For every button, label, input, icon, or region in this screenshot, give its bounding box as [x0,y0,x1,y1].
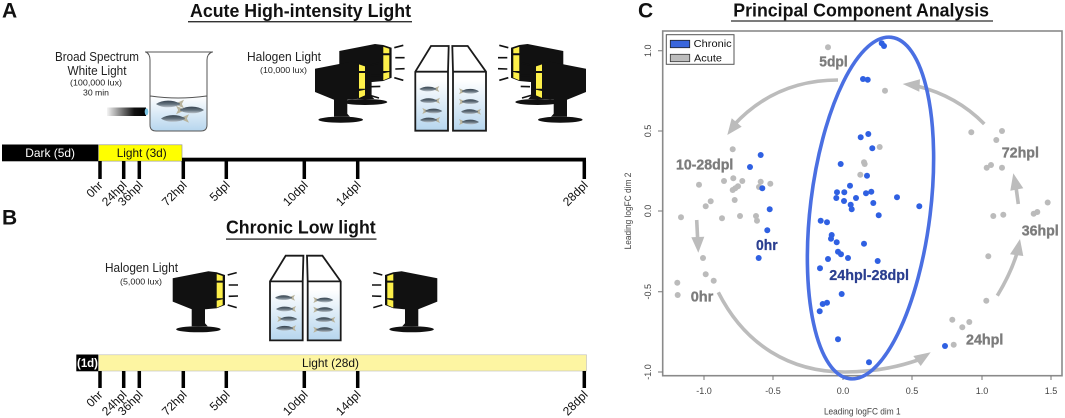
text: broad spectrum white light: Broad Spectrum [55,49,139,64]
panel letter B: B [2,206,17,230]
cluster labels: 24hpl [966,331,1003,348]
panel B: chronic low light [2,206,591,418]
timeline B ticks and labels [83,371,591,418]
scatter plot frame and axes: 0.0 [837,386,849,396]
timeline A ticks and labels [83,161,591,209]
text: halogen light 5,000 lux: (5,000 lux) [120,276,162,286]
panel C: principal component analysis [623,0,1062,417]
ellipse: chronic cluster [790,30,951,386]
text: broad spectrum white light [55,49,139,98]
timeline B ticks and labels: 24hpl [99,388,130,418]
timeline A bars [2,144,586,162]
scatter plot frame and axes: 1.0 [643,44,653,57]
legend: Chronic [694,38,732,50]
cluster labels: 5dpl [819,54,848,71]
scatter plot frame and axes: 0.5 [906,386,918,396]
timeline B bars: Light (28d) [302,356,359,370]
text: broad spectrum white light: (100,000 lux) [70,78,122,88]
scatter plot frame and axes: -0.5 [643,284,653,299]
icon: left halogen lamps [315,44,405,123]
timeline A ticks and labels: 0hr [83,178,106,200]
icon: right halogen lamps [498,44,586,123]
timeline A ticks and labels: 14dpl [333,178,364,209]
timeline B bars: (1d) [77,356,98,370]
timeline A ticks and labels: 36hpl [115,178,146,209]
icon: left halogen lamp [173,271,238,332]
timeline A ticks and labels: 10dpl [280,178,311,209]
timeline B ticks and labels: 72hpl [159,388,190,418]
timeline A ticks and labels: 72hpl [159,178,190,209]
cluster labels [676,54,1059,348]
cluster labels: 0hr [756,237,778,254]
cluster labels: 10-28dpl [676,156,733,173]
cluster labels: 72hpl [1002,145,1039,162]
icon: fish tanks [270,256,341,340]
scatter plot frame and axes: 1.5 [1045,386,1057,396]
text: halogen light 10,000 lux [247,49,321,75]
cluster labels: 0hr [691,289,713,306]
heading: Principal Component Analysis: Principal Component Analysis [733,1,989,21]
arrows: acute trajectory [691,79,1023,372]
cluster labels: 24hpl-28dpl [829,267,909,284]
timeline A bars: Dark (5d) [25,146,75,160]
timeline B ticks and labels: 14dpl [333,388,364,418]
text: halogen light 5,000 lux: Halogen Light [105,260,178,275]
timeline A ticks and labels: 5dpl [207,178,233,204]
icon: fish tanks [415,46,486,131]
text: halogen light 10,000 lux: (10,000 lux) [260,65,307,75]
scatter plot frame and axes: Leading logFC dim 2 [623,173,633,249]
timeline A ticks and labels: 28dpl [560,178,591,209]
text: broad spectrum white light: White Light [68,63,127,78]
panel A: acute high-intensity light [2,0,591,209]
scatter plot frame and axes: -1.0 [696,386,712,396]
text: halogen light 10,000 lux: Halogen Light [247,49,321,64]
timeline B ticks and labels: 28dpl [560,388,591,418]
timeline A ticks and labels: 24hpl [99,178,130,209]
timeline B ticks and labels: 36hpl [115,388,146,418]
timeline B ticks and labels: 5dpl [207,388,233,414]
scatter plot frame and axes: 0.0 [643,205,653,217]
heading: Acute High-intensity Light: Acute High-intensity Light [190,1,411,21]
timeline B bars [76,354,587,371]
scatter plot frame and axes: 0.5 [643,125,653,137]
icon: beaker with fish and light fibre [107,52,213,131]
cluster labels: 36hpl [1022,222,1059,239]
heading: Chronic Low light: Chronic Low light [226,217,376,237]
scatter plot frame and axes: 1.0 [976,386,988,396]
legend: Acute [694,52,722,64]
scatter plot frame and axes: -1.0 [643,364,653,380]
icon: right halogen lamp [372,271,437,332]
points: acute samples [674,44,1051,348]
timeline A bars: Light (3d) [117,146,167,160]
text: halogen light 5,000 lux [105,260,178,286]
scatter plot frame and axes: -0.5 [765,386,781,396]
scatter plot frame and axes: Leading logFC dim 1 [824,407,901,417]
timeline B ticks and labels: 0hr [83,388,106,410]
text: broad spectrum white light: 30 min [83,88,109,98]
points: chronic samples [747,40,948,365]
scatter plot frame and axes [623,31,1062,417]
timeline B ticks and labels: 10dpl [280,388,311,418]
legend [666,35,734,64]
